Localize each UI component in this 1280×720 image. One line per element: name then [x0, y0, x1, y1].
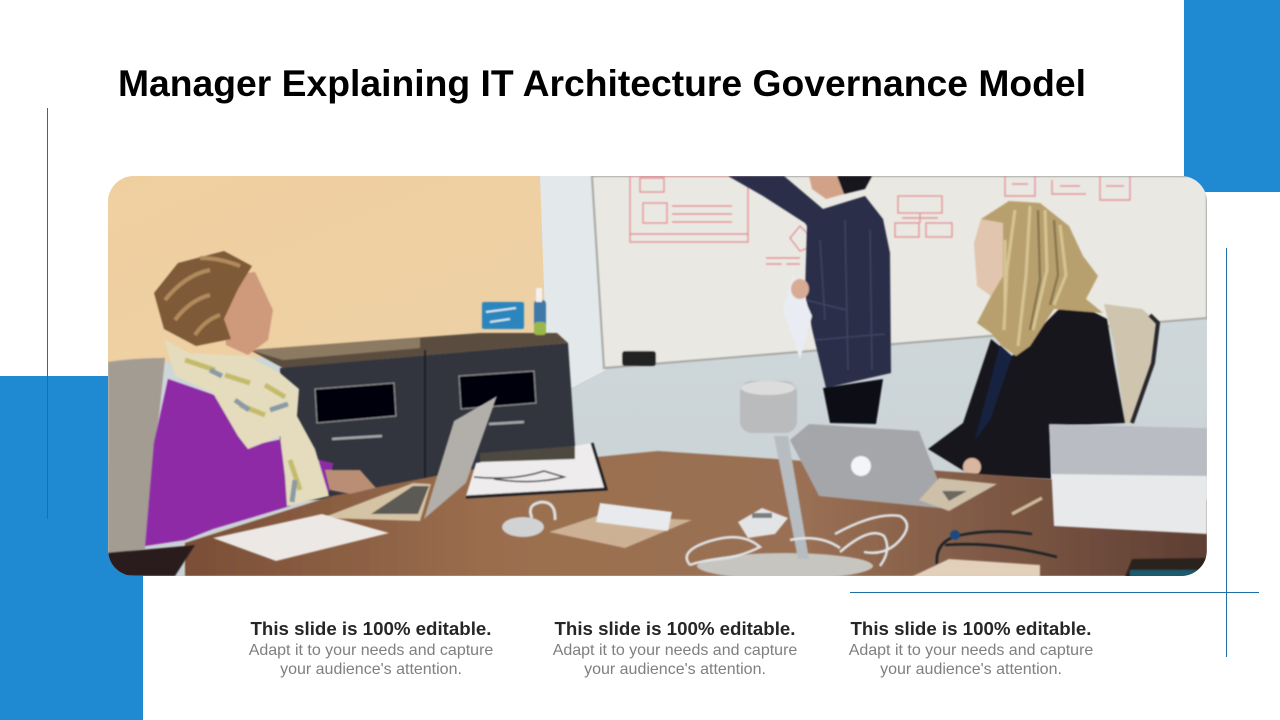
caption 1: This slide is 100% editable. [251, 618, 491, 639]
caption 1 [248, 618, 493, 678]
caption 3: Adapt it to your needs and capture [849, 642, 1093, 658]
laptop left [322, 396, 497, 521]
caption 3 [848, 618, 1093, 678]
woman on left [145, 251, 376, 546]
title: Manager Explaining IT Architecture Governance Model [118, 63, 1086, 104]
whiteboard [592, 176, 1207, 368]
caption 3: This slide is 100% editable. [851, 618, 1091, 639]
caption 2: Adapt it to your needs and capture [553, 642, 797, 658]
blue block: top right [1184, 0, 1280, 192]
table [185, 451, 1207, 576]
caption 3: your audience's attention. [880, 660, 1062, 678]
cables and devices [687, 498, 1207, 577]
caption 1: your audience's attention. [280, 660, 462, 678]
laptop right [790, 424, 997, 511]
wall [108, 176, 1207, 576]
chair right [1104, 304, 1158, 423]
caption 2 [552, 618, 797, 678]
blue block: bottom left [0, 376, 143, 720]
caption 1: Adapt it to your needs and capture [249, 642, 493, 658]
caption 2: This slide is 100% editable. [555, 618, 795, 639]
caption 2: your audience's attention. [584, 660, 766, 678]
tablet on right [1049, 424, 1207, 534]
cabinet [250, 288, 575, 500]
conference microphone [697, 381, 873, 579]
presenter [728, 176, 891, 424]
chair left [108, 358, 165, 556]
notebook and papers [108, 443, 692, 576]
photo: manager at whiteboard with two colleagues at a table [108, 176, 1207, 576]
woman on right [928, 201, 1125, 479]
